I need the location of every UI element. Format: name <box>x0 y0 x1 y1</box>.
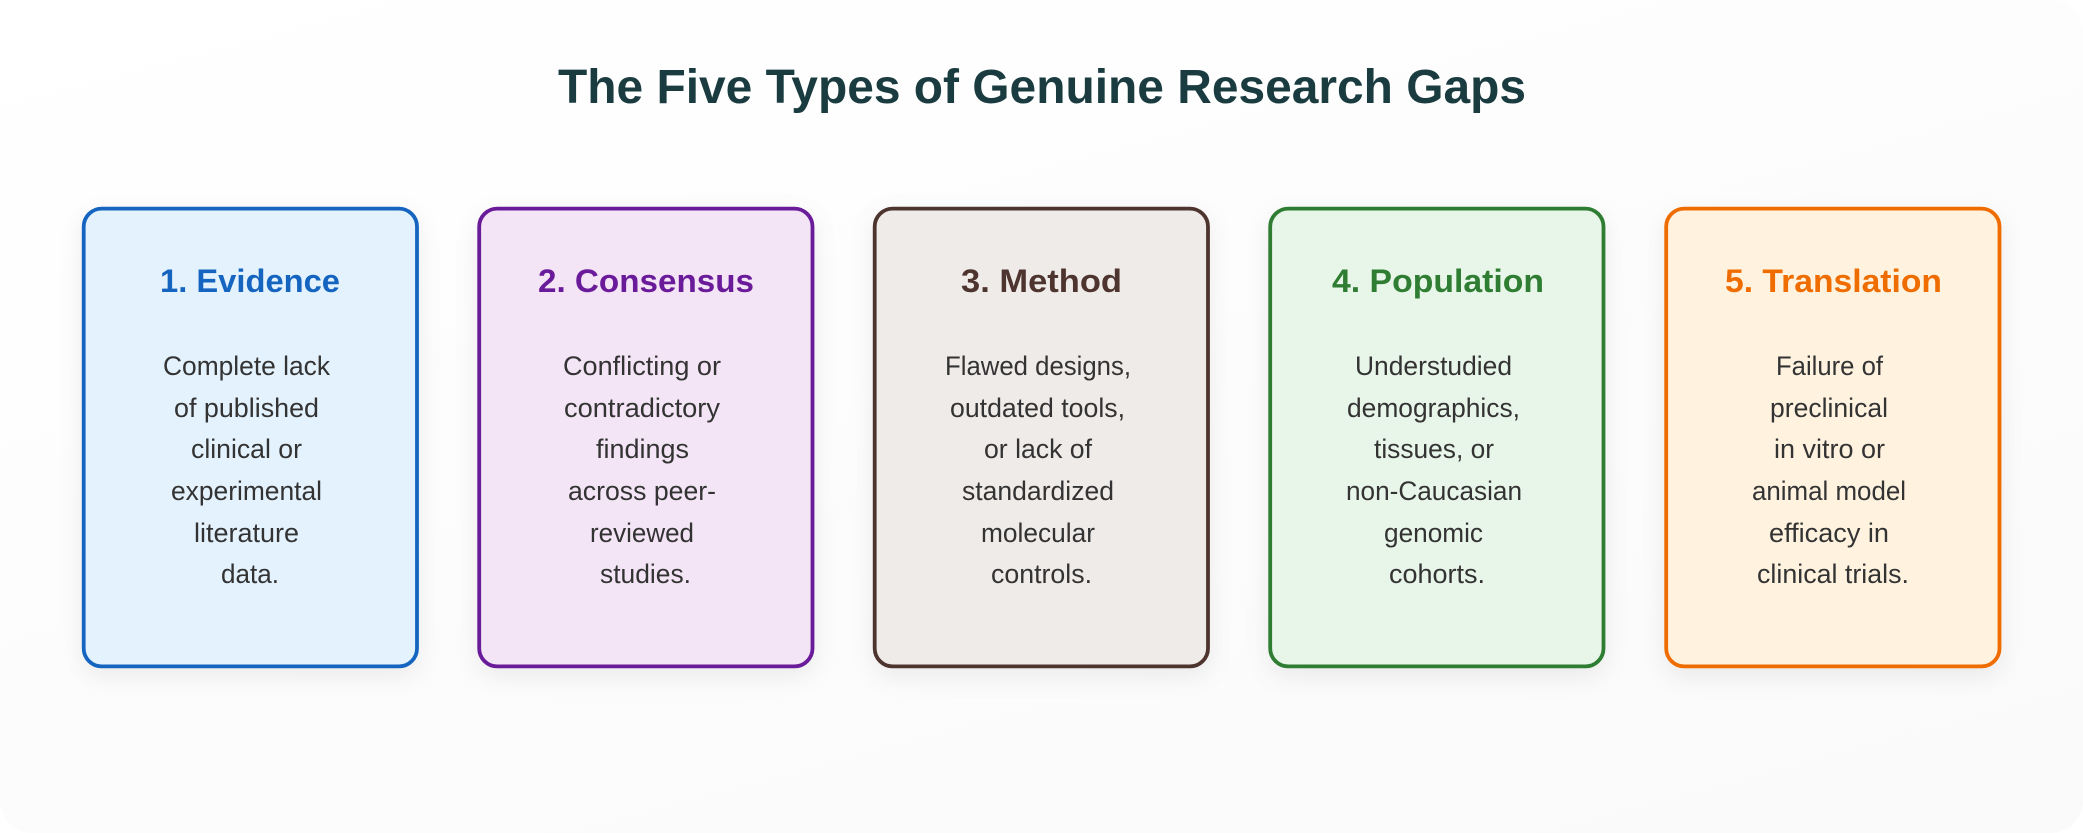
heading: 2. Consensus: 2. Consensus <box>538 263 754 299</box>
panel: 1. Evidence <box>84 209 417 666</box>
text block: method description: outdated tools, <box>950 393 1125 423</box>
panel: 5. Translation <box>1666 209 2000 666</box>
text block: evidence description: data. <box>221 559 279 589</box>
card background <box>84 209 417 666</box>
text block: translation description: clinical trials. <box>1757 559 1909 589</box>
panel: 2. Consensus <box>479 209 812 666</box>
text block: population description: cohorts. <box>1389 559 1485 589</box>
heading: 4. Population: 4. Population <box>1332 263 1544 299</box>
text block: consensus description: contradictory <box>564 393 720 423</box>
text block: method description: standardized <box>962 476 1114 506</box>
card background <box>479 209 812 666</box>
text block: method description: controls. <box>991 559 1092 589</box>
text block: population description <box>1346 351 1522 589</box>
text block: translation description: Failure of <box>1776 351 1883 381</box>
text block: population description: non-Caucasian <box>1346 476 1522 506</box>
text block: evidence description <box>163 351 330 589</box>
panel: 3. Method <box>875 209 1208 666</box>
text block: population description: genomic <box>1384 518 1483 548</box>
text block: method description: or lack of <box>984 434 1092 464</box>
text block: method description <box>945 351 1131 589</box>
text block: translation description: in vitro or <box>1774 434 1885 464</box>
text block: evidence description: clinical or <box>191 434 302 464</box>
text block: consensus description <box>563 351 721 589</box>
text block: translation description <box>1752 351 1909 589</box>
text block: translation description: efficacy in <box>1769 518 1889 548</box>
text block: evidence description: literature <box>194 518 299 548</box>
text block: consensus description: across peer- <box>568 476 716 506</box>
text block: method description: Flawed designs, <box>945 351 1131 381</box>
title: The Five Types of Genuine Research Gaps <box>558 61 1526 114</box>
text block: population description: demographics, <box>1347 393 1520 423</box>
text block: method description: molecular <box>981 518 1095 548</box>
text block: translation description: animal model <box>1752 476 1906 506</box>
text block: evidence description: of published <box>174 393 319 423</box>
card background <box>875 209 1208 666</box>
heading: 5. Translation: 5. Translation <box>1725 263 1942 299</box>
heading: 3. Method: 3. Method <box>961 263 1122 299</box>
heading: 1. Evidence: 1. Evidence <box>160 263 340 299</box>
text block: population description: tissues, or <box>1374 434 1494 464</box>
card background <box>1666 209 2000 666</box>
text block: population description: Understudied <box>1355 351 1512 381</box>
text block: consensus description: findings <box>596 434 689 464</box>
panel: 4. Population <box>1270 209 1604 666</box>
text block: consensus description: reviewed <box>590 518 694 548</box>
text block: consensus description: Conflicting or <box>563 351 721 381</box>
text block: evidence description: experimental <box>171 476 322 506</box>
text block: consensus description: studies. <box>600 559 691 589</box>
text block: evidence description: Complete lack <box>163 351 330 381</box>
text block: translation description: preclinical <box>1770 393 1888 423</box>
card background <box>1270 209 1604 666</box>
